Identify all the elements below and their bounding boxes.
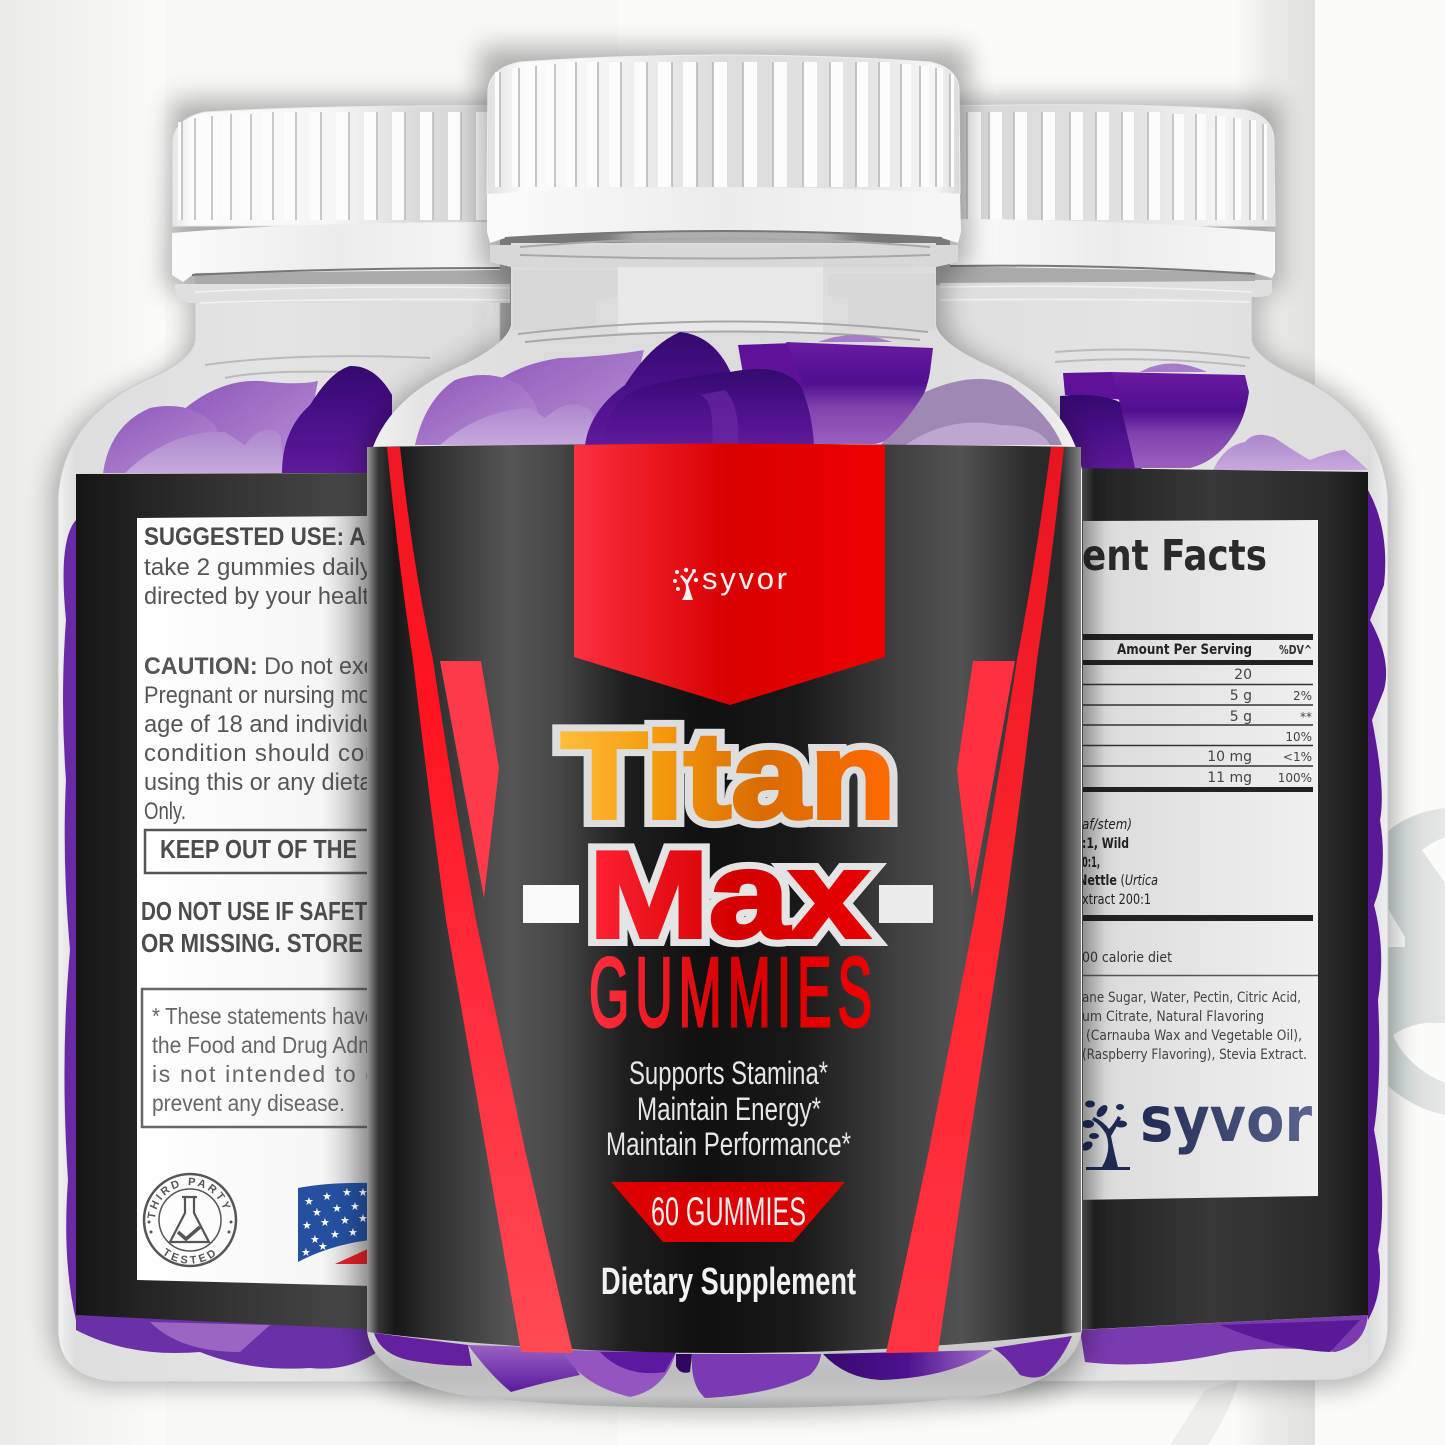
icon: american flag: ★ bbox=[358, 1213, 368, 1225]
icon: american flag: ★ bbox=[330, 1229, 340, 1241]
title: Max: Max bbox=[589, 827, 869, 964]
text block: caution: CAUTION: Do not exceed bbox=[144, 653, 414, 680]
icon: american flag bbox=[298, 1183, 370, 1264]
text block: safety warning: OR MISSING. STORE bbox=[141, 928, 363, 958]
gummies side bbox=[1368, 490, 1386, 1320]
collar ledge bbox=[490, 245, 958, 267]
text block: proprietary blend bbox=[1083, 818, 1158, 904]
neck center window bbox=[618, 262, 823, 332]
bottle: front bbox=[360, 48, 1090, 1412]
glass body bbox=[58, 285, 500, 1382]
panel: supplement facts bbox=[1075, 520, 1318, 1200]
icon: american flag: ★ bbox=[350, 1201, 360, 1213]
cap bbox=[950, 105, 1275, 278]
text block: other ingredients bbox=[1082, 990, 1307, 1063]
text block: safety warning bbox=[142, 902, 367, 952]
subtitle: gummies: GUMMIES bbox=[589, 937, 878, 1047]
red wedge right bbox=[957, 661, 1015, 897]
text block: calorie note: 00 calorie diet bbox=[1082, 950, 1172, 966]
icon: third party tested seal: TESTED bbox=[164, 1248, 215, 1264]
gummies top bbox=[415, 332, 1062, 445]
red side stripe left bbox=[387, 447, 573, 1353]
base glass bbox=[367, 1320, 1082, 1408]
cap bbox=[487, 55, 961, 243]
gummies bottom bbox=[76, 1315, 380, 1369]
label bbox=[367, 444, 1081, 1353]
icon: tree bbox=[673, 568, 698, 600]
red top banner bbox=[574, 444, 885, 705]
cap bbox=[172, 106, 500, 282]
bar left bbox=[523, 885, 579, 923]
logo: syvor: syvor bbox=[702, 561, 787, 596]
gummies bottom bbox=[374, 1333, 1072, 1398]
text block: caution bbox=[144, 657, 367, 824]
gummies bottom bbox=[1080, 1315, 1368, 1364]
glass body bbox=[367, 243, 1082, 1408]
table: nutrition values: %DV^ bbox=[1279, 643, 1312, 657]
gummies top bbox=[1060, 364, 1368, 470]
callout: fda disclaimer: the Food and Drug Admin bbox=[152, 1032, 392, 1058]
callout: keep out of reach bbox=[144, 828, 367, 874]
bottle: back left bbox=[37, 85, 633, 1400]
text block: other ingredients: um Citrate, Natural Flavoring bbox=[1082, 1009, 1264, 1025]
thread rings bbox=[518, 238, 930, 342]
watermark leaf: bottom bbox=[1170, 1378, 1240, 1445]
icon: american flag: ★ bbox=[304, 1196, 314, 1208]
icon: american flag: ★ bbox=[358, 1187, 368, 1199]
label bbox=[1075, 468, 1368, 1330]
callout: fda disclaimer: * These statements have bbox=[152, 1003, 376, 1029]
watermark leaf: right bbox=[1387, 808, 1445, 1115]
benefits: Maintain Energy* bbox=[637, 1091, 821, 1127]
title: Titan: Titan bbox=[561, 708, 896, 845]
text block: proprietary blend: 0:1, bbox=[1082, 855, 1100, 871]
gummies top bbox=[103, 366, 392, 473]
icon: american flag: ★ bbox=[318, 1241, 328, 1253]
callout: fda disclaimer: prevent any disease. bbox=[152, 1090, 345, 1116]
text block: directions: directed by your health bbox=[144, 583, 382, 610]
icon: american flag: ★ bbox=[342, 1187, 352, 1199]
icon: american flag: ★ bbox=[301, 1247, 311, 1259]
icon: american flag: ★ bbox=[332, 1203, 342, 1215]
table: nutrition values: 10% bbox=[1285, 730, 1312, 744]
logo: syvor: syvor bbox=[1140, 1083, 1312, 1156]
label bbox=[76, 473, 380, 1330]
table: nutrition values: ** bbox=[1300, 710, 1312, 724]
text block: directions: take 2 gummies daily bbox=[144, 554, 372, 581]
text block: caution: age of 18 and individuals bbox=[144, 711, 406, 738]
table: nutrition values: 5 g bbox=[1230, 688, 1252, 704]
table: nutrition values bbox=[1075, 634, 1313, 921]
icon: third party tested seal: THIRD PARTY bbox=[147, 1178, 231, 1218]
text block: caution: condition should consult bbox=[144, 740, 419, 767]
heading: supplement facts: ent Facts bbox=[1082, 531, 1267, 581]
title: Titan: Titan bbox=[561, 708, 896, 845]
icon: third party tested seal bbox=[142, 1172, 238, 1268]
table: nutrition values: <1% bbox=[1283, 750, 1312, 764]
neck rings bbox=[205, 356, 430, 378]
cast shadow bbox=[52, 100, 620, 1385]
red side stripe right bbox=[886, 447, 1064, 1353]
table: nutrition values: 5 g bbox=[1230, 709, 1252, 725]
text block: proprietary blend: xtract 200:1 bbox=[1082, 892, 1151, 908]
collar glass bbox=[175, 268, 510, 303]
text block: proprietary blend: :1, Wild bbox=[1082, 836, 1129, 852]
table: nutrition values: 2% bbox=[1293, 689, 1312, 703]
benefits: Maintain Performance* bbox=[606, 1126, 851, 1162]
icon: american flag: ★ bbox=[312, 1207, 322, 1219]
text block: caution: Only. bbox=[144, 798, 186, 825]
logo: syvor bbox=[673, 561, 787, 600]
icon: american flag: ★ bbox=[348, 1227, 358, 1239]
benefits: Supports Stamina* bbox=[629, 1055, 828, 1091]
title: Max: Max bbox=[589, 827, 869, 964]
neck rings bbox=[1055, 350, 1250, 366]
icon: american flag: ★ bbox=[320, 1217, 330, 1229]
text block: caution: using this or any dietary bbox=[144, 769, 392, 796]
text block: proprietary blend: Nettle (Urtica bbox=[1078, 873, 1158, 889]
red wedge left bbox=[440, 661, 499, 898]
rear collars through glass bbox=[513, 270, 935, 330]
table: nutrition values: 11 mg bbox=[1207, 770, 1252, 786]
callout: fda disclaimer bbox=[140, 988, 367, 1128]
logo: syvor bbox=[1083, 1100, 1312, 1170]
table: nutrition values: 10 mg bbox=[1207, 749, 1252, 765]
cast shadow bbox=[830, 100, 1394, 1388]
icon: american flag: ★ bbox=[302, 1220, 312, 1232]
text block: safety warning: DO NOT USE IF SAFETY bbox=[141, 896, 381, 926]
text block: proprietary blend: af/stem) bbox=[1082, 817, 1132, 833]
collar glass bbox=[940, 268, 1272, 302]
glass body bbox=[900, 285, 1388, 1382]
text block: directions bbox=[144, 558, 367, 609]
icon: american flag: ★ bbox=[340, 1215, 350, 1227]
heading: suggested use: SUGGESTED USE: As bbox=[144, 523, 378, 551]
table: nutrition values: 20 bbox=[1234, 667, 1252, 683]
bottle shadow bbox=[360, 48, 1090, 1412]
text block: other ingredients: (Carnauba Wax and Vegetable Oil), bbox=[1086, 1028, 1302, 1044]
table: nutrition values: Amount Per Serving bbox=[1117, 642, 1252, 658]
badge: 60 gummies: 60 GUMMIES bbox=[651, 1190, 806, 1234]
gummies side bbox=[63, 520, 76, 1320]
text block: caution: Pregnant or nursing moth bbox=[144, 682, 389, 709]
text block: other ingredients: (Raspberry Flavoring), Stevia Extract. bbox=[1082, 1047, 1307, 1063]
callout: keep out of reach: KEEP OUT OF THE bbox=[160, 834, 357, 864]
badge: 60 gummies bbox=[611, 1182, 845, 1242]
callout: fda disclaimer: is not intended to diag bbox=[152, 1061, 414, 1087]
benefits bbox=[606, 1055, 851, 1162]
table: nutrition values: 100% bbox=[1278, 771, 1312, 785]
text: dietary supplement: Dietary Supplement bbox=[601, 1261, 856, 1303]
icon: american flag: ★ bbox=[310, 1234, 320, 1246]
panel: directions bbox=[137, 516, 367, 1286]
bar right bbox=[879, 885, 933, 923]
icon: american flag: ★ bbox=[322, 1191, 332, 1203]
text block: other ingredients: ane Sugar, Water, Pectin, Citric Acid, bbox=[1082, 990, 1301, 1006]
bottle: back right bbox=[830, 100, 1394, 1388]
